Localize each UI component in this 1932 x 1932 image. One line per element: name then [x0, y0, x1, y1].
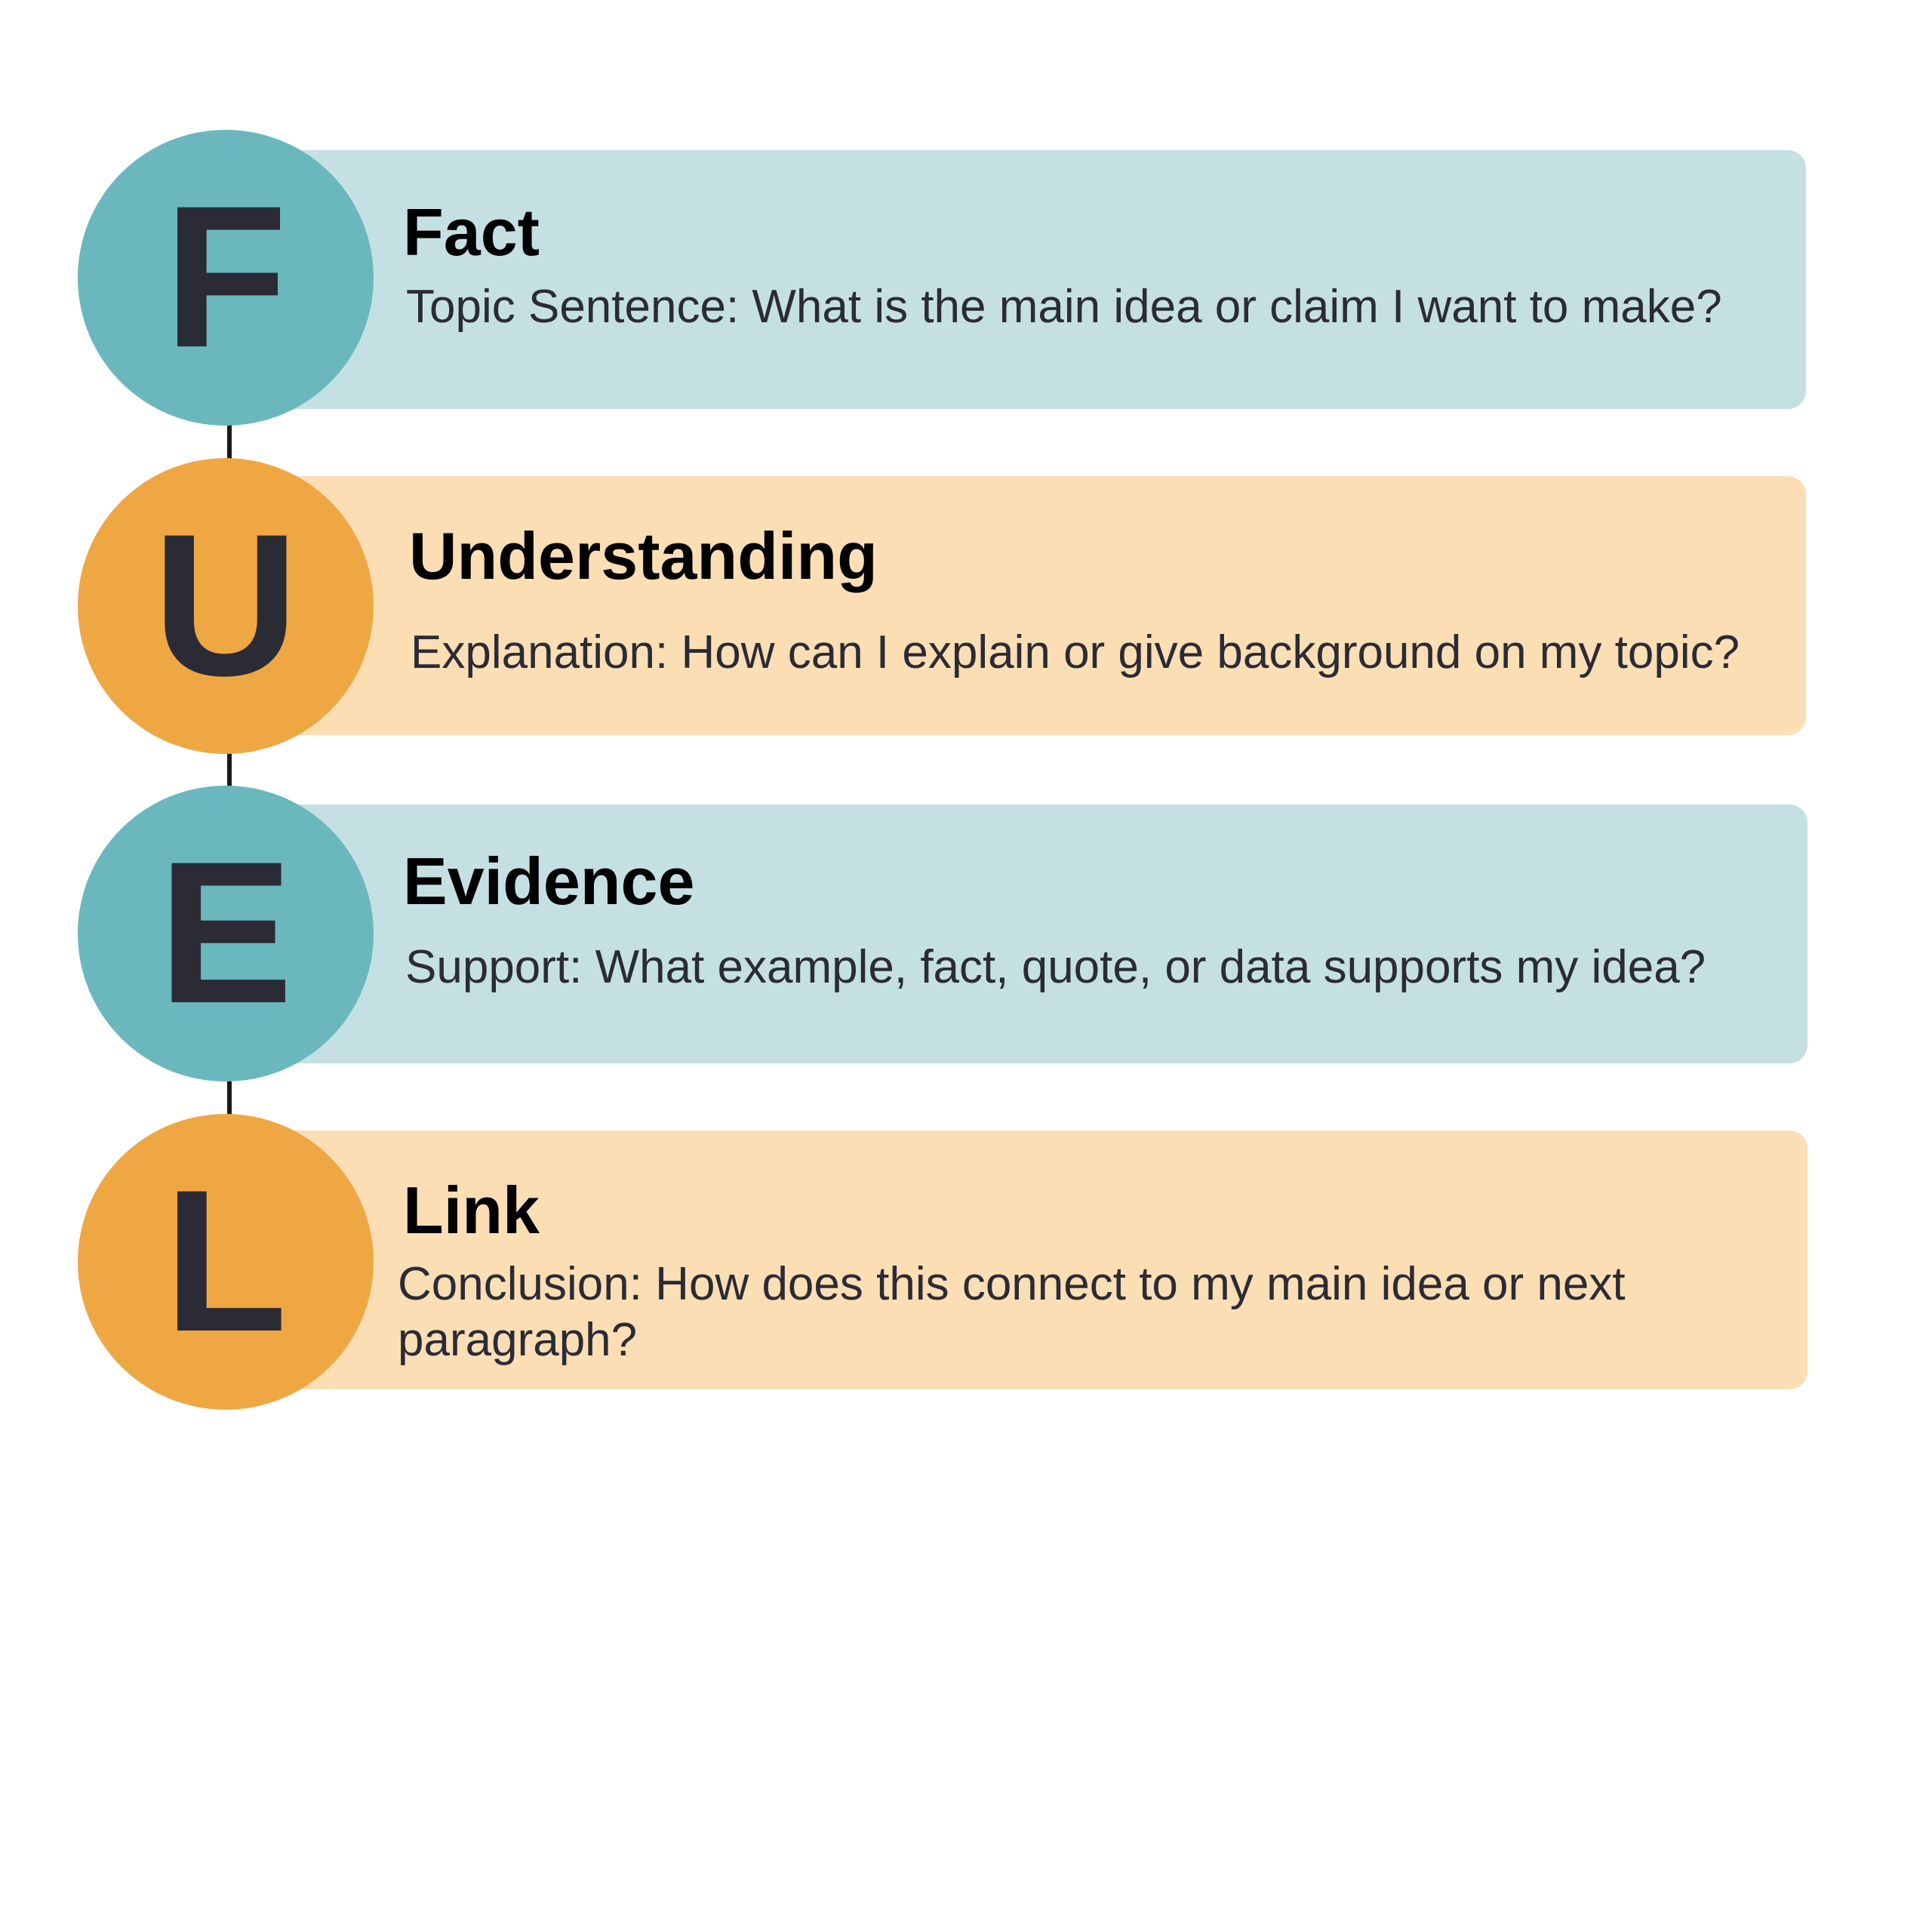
panel: understanding [246, 476, 1806, 735]
heading: evidence: Evidence [403, 844, 694, 918]
text: fact description: Topic Sentence: What is the main idea or claim I want to make? [406, 281, 1722, 333]
icon: circle F: F [164, 163, 288, 389]
heading: fact: Fact [403, 195, 540, 269]
panel: link [246, 1131, 1807, 1389]
heading: understanding: Understanding [409, 518, 878, 593]
icon: circle U [78, 458, 374, 754]
icon: circle U: U [152, 491, 299, 718]
icon: circle E [78, 786, 374, 1081]
text: understanding description: Explanation: How can I explain or give background on my topic? [411, 626, 1740, 678]
icon: circle F [78, 130, 374, 426]
text: link description: Conclusion: How does this connect to my main idea or next [398, 1258, 1626, 1310]
panel: fact [246, 150, 1806, 409]
icon: circle L [78, 1114, 374, 1410]
icon: circle E: E [158, 819, 293, 1045]
text: evidence description: Support: What example, fact, quote, or data supports my idea? [405, 941, 1706, 993]
panel: evidence [246, 804, 1807, 1063]
connector line [227, 278, 232, 1262]
text: link description: paragraph? [398, 1314, 637, 1366]
heading: link: Link [403, 1173, 540, 1247]
icon: circle L: L [164, 1147, 288, 1374]
